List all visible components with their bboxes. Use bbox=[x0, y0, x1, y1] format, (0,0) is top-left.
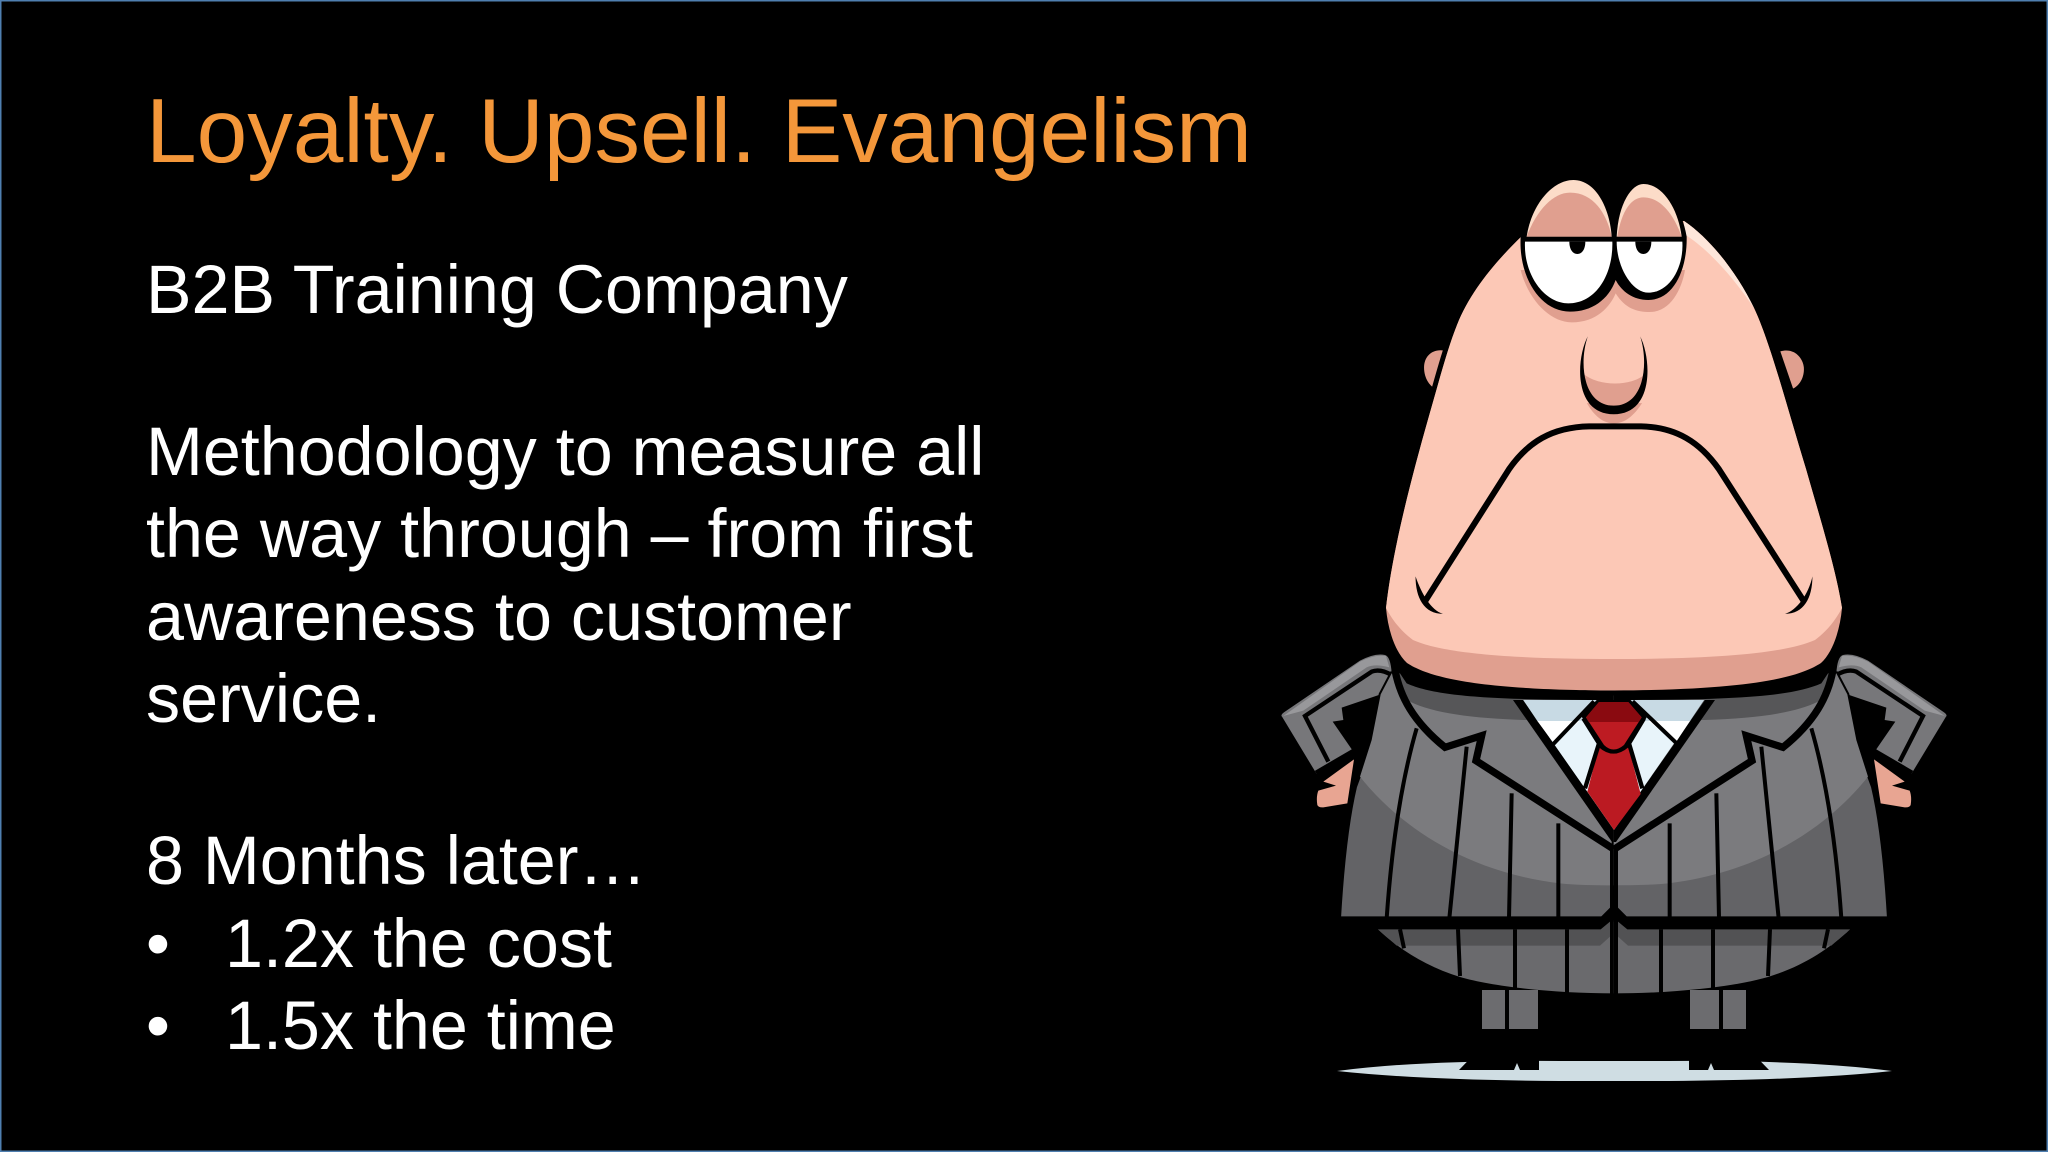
shoes bbox=[1459, 1041, 1769, 1070]
text block: results: 8 Months later… bbox=[146, 823, 647, 899]
face lit bbox=[1386, 221, 1842, 659]
legs bbox=[1482, 990, 1746, 1029]
text block: results: 1.2x the cost bbox=[225, 906, 612, 982]
illustration: grumpy businessman bbox=[1281, 176, 1947, 1081]
shirt bbox=[1523, 700, 1704, 830]
ground shadow bbox=[1337, 1061, 1892, 1081]
eyes bbox=[1520, 176, 1687, 322]
mouth bbox=[1416, 426, 1812, 614]
text block: results: 1.5x the time bbox=[225, 988, 616, 1064]
face shadow base bbox=[1386, 221, 1842, 690]
head bbox=[1386, 176, 1842, 690]
suit: right half bbox=[1614, 653, 1947, 995]
suit: left half bbox=[1281, 653, 1614, 995]
title: Loyalty. Upsell. Evangelism bbox=[146, 81, 1252, 182]
ears bbox=[1424, 350, 1804, 389]
tie bbox=[1582, 700, 1647, 830]
text block: methodology: the way through – from first bbox=[146, 496, 973, 572]
nose bbox=[1580, 336, 1647, 424]
shirt and tie bbox=[1523, 700, 1704, 830]
text block: methodology: Methodology to measure all bbox=[146, 414, 984, 490]
text block: results: • bbox=[146, 988, 170, 1064]
text block: methodology: awareness to customer bbox=[146, 579, 852, 655]
text block: methodology: service. bbox=[146, 661, 381, 737]
text block: results bbox=[146, 823, 647, 1064]
text block: results: • bbox=[146, 906, 170, 982]
text block: methodology bbox=[146, 414, 984, 737]
text block: company: B2B Training Company bbox=[146, 252, 848, 328]
